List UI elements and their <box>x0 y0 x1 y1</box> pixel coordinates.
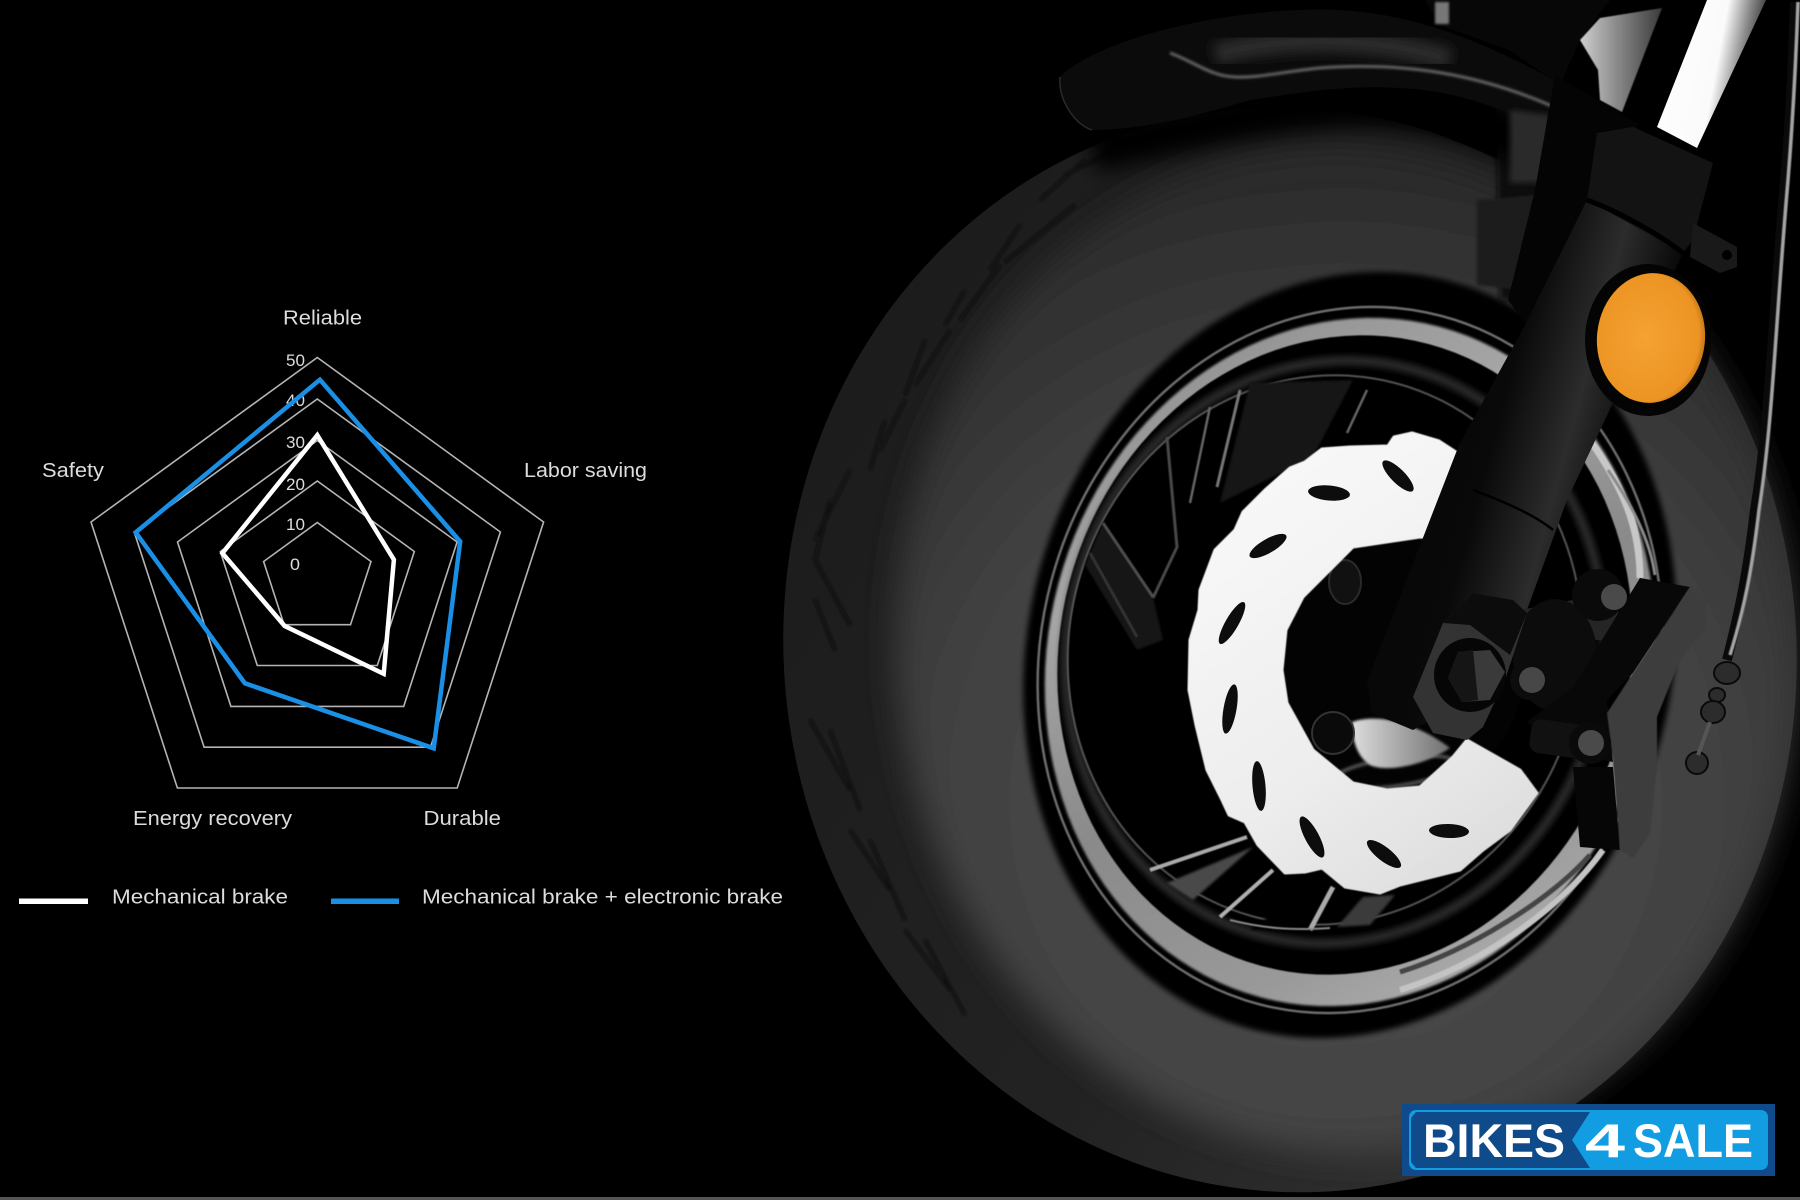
logo wordmark <box>1423 1114 1753 1167</box>
mudguard bracket <box>1510 110 1550 183</box>
rim inner black band <box>1056 334 1631 976</box>
tire <box>783 122 1800 1192</box>
axis tick labels <box>286 351 305 574</box>
legend: mechanical plus electronic brake: Mechanical brake + electronic brake <box>422 886 783 908</box>
mount behind caliper <box>1520 590 1625 690</box>
rim inner sheen <box>1056 354 1604 950</box>
axis labels <box>42 308 647 830</box>
axis tick labels: 0 <box>290 555 300 574</box>
opening lip <box>1066 374 1578 926</box>
axle nut <box>1434 638 1506 712</box>
logo wordmark: 4 <box>1585 1114 1625 1167</box>
disc slots <box>1214 456 1469 872</box>
hub bolt <box>1312 712 1354 754</box>
caliper body <box>1607 587 1707 858</box>
fender highlight <box>1170 53 1565 112</box>
fork axle bracket <box>1413 593 1527 740</box>
black joint <box>1508 101 1585 318</box>
fender <box>1060 10 1640 170</box>
steel wedge <box>1580 8 1662 112</box>
axis tick labels: 40 <box>286 391 305 410</box>
axis tick labels: 20 <box>286 475 305 494</box>
right silver bands <box>1400 440 1655 990</box>
caliper bolts <box>1510 569 1627 764</box>
legend: mechanical brake <box>19 886 288 908</box>
fork collar <box>1587 200 1683 253</box>
lower fender bracket <box>1476 195 1534 289</box>
hub detail <box>1329 560 1361 604</box>
spoke blades <box>1085 380 1395 930</box>
axis labels: Energy recovery <box>133 808 292 830</box>
axis tick labels: 10 <box>286 515 305 534</box>
shadow cast on tire <box>1092 105 1570 170</box>
disc centre hole <box>1275 535 1525 795</box>
brake line <box>1686 2 1798 774</box>
logo dark section <box>1411 1112 1590 1168</box>
axis tick labels: 50 <box>286 351 305 370</box>
wheel rim <box>1020 269 1678 1042</box>
axis labels: Safety <box>42 460 104 482</box>
shroud tab <box>1690 223 1737 273</box>
logo: Bikes 4 Sale <box>1402 1104 1775 1176</box>
axis tick labels: 30 <box>286 433 305 452</box>
motorcycle front wheel <box>713 0 1800 1200</box>
wheel opening <box>1068 444 1164 768</box>
disc plate <box>1189 433 1537 893</box>
line fittings <box>1686 662 1740 774</box>
axis labels: Durable <box>424 808 501 830</box>
rim bright band <box>1042 316 1656 1008</box>
hub bright crescent <box>1352 719 1450 768</box>
spoke highlights <box>1090 390 1367 930</box>
chrome tube <box>1657 0 1766 148</box>
small chrome fitting <box>1435 2 1449 24</box>
reflector <box>1585 264 1711 416</box>
fender sheen <box>1215 41 1450 60</box>
hub sheen <box>1340 754 1452 789</box>
logo wordmark: SALE <box>1633 1114 1753 1167</box>
dark panel behind fork top <box>1496 160 1536 302</box>
black arm <box>1527 578 1690 762</box>
bracket top shade <box>1443 593 1527 655</box>
rim thin outer line <box>1036 305 1664 1015</box>
rear housing <box>1513 599 1597 711</box>
bottom edge line <box>0 1197 1800 1200</box>
fender lobe edge <box>1060 77 1092 130</box>
fork seam <box>1473 490 1553 530</box>
legend: mechanical brake: Mechanical brake <box>112 886 288 908</box>
fork shroud <box>1587 127 1713 253</box>
legend <box>19 886 783 908</box>
fork tube <box>1367 200 1683 730</box>
axis labels: Reliable <box>283 308 362 330</box>
radar chart <box>42 308 647 830</box>
series: mechanical + electronic brake <box>136 380 460 748</box>
series: mechanical brake <box>222 435 394 674</box>
brake caliper <box>1413 569 1707 858</box>
brake disc <box>1189 433 1537 893</box>
lower black pad <box>1573 767 1620 850</box>
upper hardware <box>1425 0 1610 85</box>
axis labels: Labor saving <box>524 460 647 482</box>
grid: concentric pentagons <box>91 358 544 788</box>
front fork <box>1367 0 1766 730</box>
logo wordmark: BIKES <box>1423 1114 1565 1167</box>
tread chevrons <box>810 150 1115 1015</box>
